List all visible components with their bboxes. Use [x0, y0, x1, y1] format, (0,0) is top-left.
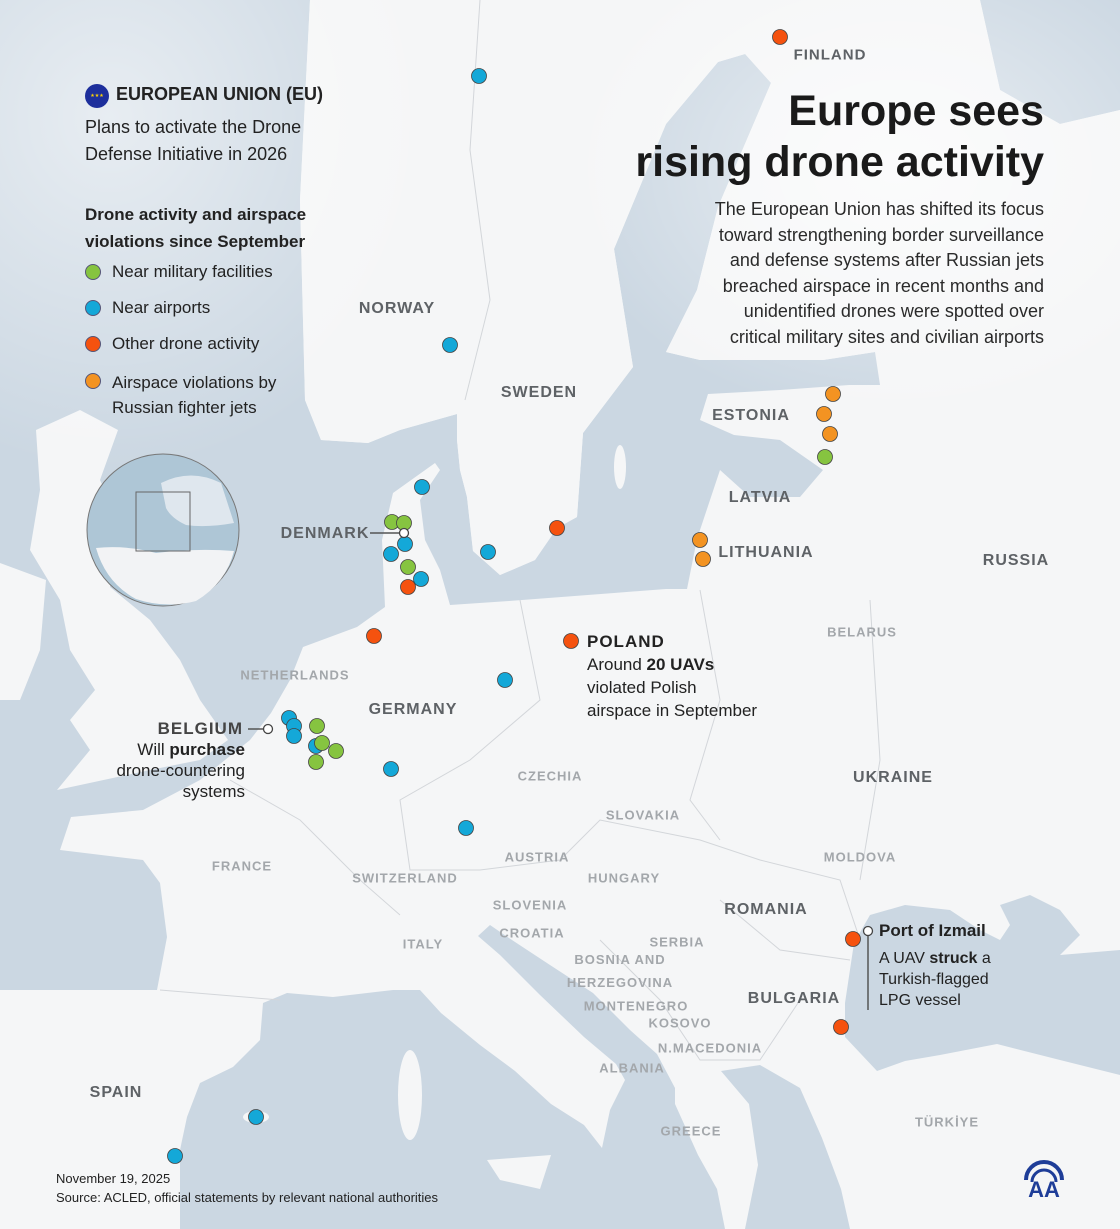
- country labels: BULGARIA: [748, 990, 840, 1007]
- callout: Port of Izmail: [879, 921, 991, 1009]
- country labels: MOLDOVA: [824, 850, 896, 864]
- country labels: GERMANY: [369, 701, 457, 718]
- callout: Port of Izmail: Turkish-flagged: [879, 971, 989, 988]
- intro text: unidentified drones were spotted over: [744, 301, 1044, 321]
- footer: date and source: Source: ACLED, official statements by relevant national authorities: [56, 1190, 438, 1205]
- callout: Poland: Around 20 UAVs: [587, 655, 714, 674]
- footer: date and source: November 19, 2025: [56, 1171, 170, 1186]
- country labels: HUNGARY: [588, 870, 660, 886]
- country labels: DENMARK: [281, 525, 369, 542]
- legend: drone activity: Near airports: [112, 298, 210, 317]
- legend: EU heading: Plans to activate the Drone: [85, 117, 301, 137]
- country labels: RUSSIA: [983, 552, 1049, 569]
- country labels: LATVIA: [729, 489, 791, 506]
- intro text: critical military sites and civilian airports: [730, 326, 1044, 346]
- callout: Belgium: drone-countering: [116, 761, 245, 780]
- country labels: LITHUANIA: [718, 544, 814, 561]
- country labels: MONTENEGRO: [584, 998, 688, 1014]
- country labels: GREECE: [661, 1124, 721, 1138]
- legend: EU heading: EUROPEAN UNION (EU): [116, 84, 323, 104]
- legend: EU heading: Defense Initiative in 2026: [85, 144, 287, 164]
- legend: drone activity: Drone activity and airspace: [85, 205, 306, 224]
- legend: drone activity: Near military facilities: [112, 262, 273, 281]
- callout: Belgium: Will purchase: [137, 740, 245, 759]
- legend: drone activity: Russian fighter jets: [112, 398, 257, 417]
- country labels: NETHERLANDS: [240, 668, 350, 682]
- globe inset: [86, 454, 240, 606]
- title: [635, 87, 1044, 186]
- country labels: AUSTRIA: [505, 850, 569, 864]
- country labels: N.MACEDONIA: [658, 1040, 762, 1056]
- country labels: SWEDEN: [501, 384, 577, 401]
- callout: Port of Izmail: LPG vessel: [879, 992, 961, 1009]
- legend: EU heading: [85, 84, 323, 164]
- callout: Port of Izmail: A UAV struck a: [879, 950, 991, 967]
- callout: Port of Izmail: Port of Izmail: [879, 921, 986, 940]
- country labels: FRANCE: [212, 858, 272, 874]
- country labels: SWITZERLAND: [352, 870, 458, 886]
- legend: drone activity: Airspace violations by: [112, 373, 276, 392]
- country labels: ESTONIA: [712, 407, 790, 424]
- callout: Poland: POLAND: [587, 632, 665, 651]
- country labels: ITALY: [403, 936, 443, 952]
- callout: Belgium: BELGIUM: [158, 719, 243, 738]
- country labels: SLOVAKIA: [606, 808, 680, 822]
- intro text: [715, 199, 1044, 347]
- callout: Belgium: systems: [183, 782, 245, 801]
- callout: Belgium: [116, 719, 245, 801]
- country labels: BOSNIA AND: [574, 952, 666, 967]
- country labels: BELARUS: [827, 624, 897, 640]
- country labels: NORWAY: [359, 300, 435, 317]
- callout: Poland: airspace in September: [587, 701, 757, 720]
- country labels: HERZEGOVINA: [567, 975, 673, 990]
- title: Europe sees: [788, 87, 1044, 135]
- icon: EU flag: [85, 84, 109, 108]
- intro text: and defense systems after Russian jets: [730, 250, 1044, 270]
- icon: EU flag: ★★★: [90, 93, 104, 99]
- country labels: CROATIA: [499, 926, 565, 940]
- country labels: CZECHIA: [518, 768, 582, 784]
- intro text: The European Union has shifted its focus: [715, 199, 1044, 219]
- legend: drone activity: violations since September: [85, 232, 305, 251]
- country labels: ALBANIA: [599, 1060, 665, 1076]
- country labels: FINLAND: [794, 46, 866, 64]
- footer: date and source: [56, 1171, 438, 1205]
- country labels: ROMANIA: [724, 901, 808, 918]
- intro text: toward strengthening border surveillance: [719, 224, 1044, 244]
- logo: AA: [1024, 1160, 1064, 1198]
- legend: drone activity: [85, 205, 306, 417]
- country labels: KOSOVO: [648, 1016, 712, 1030]
- country labels: SERBIA: [649, 934, 705, 950]
- legend: drone activity: Other drone activity: [112, 334, 259, 353]
- country labels: UKRAINE: [853, 769, 933, 786]
- title: rising drone activity: [635, 138, 1044, 186]
- country labels: TÜRKİYE: [915, 1114, 979, 1130]
- callout: Poland: violated Polish: [587, 678, 697, 697]
- callout: Poland: [587, 632, 757, 720]
- country labels: SLOVENIA: [493, 898, 567, 912]
- intro text: breached airspace in recent months and: [723, 276, 1044, 296]
- country labels: SPAIN: [90, 1084, 142, 1101]
